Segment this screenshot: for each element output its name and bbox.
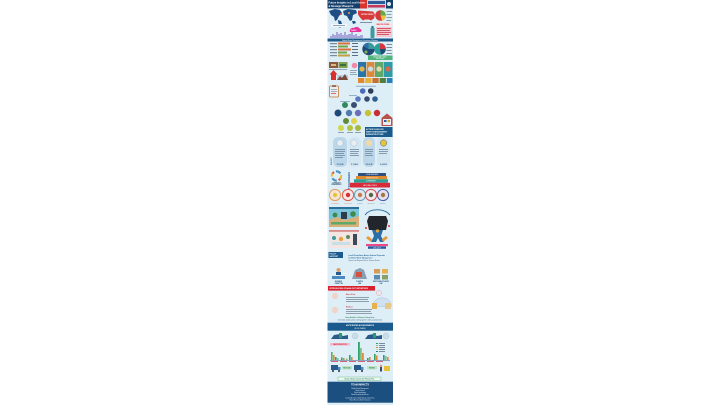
coloured tiles	[358, 62, 392, 77]
hierarchy of circular icons	[334, 86, 380, 133]
icon: committee: BUSINESS	[335, 281, 342, 283]
action plan box: INFRASTRUCTURE	[366, 133, 384, 136]
icon: recycling plant: PLASTICS	[356, 280, 363, 283]
icon: packaging: RESPONSIBLE PLASTIC	[373, 280, 389, 283]
icon: packaging	[373, 269, 389, 285]
truck 2	[354, 365, 364, 372]
title: Future Insights in Local Action	[328, 1, 366, 4]
action plan box: ACTION PLAN FOR	[366, 128, 384, 131]
card 1: $ 1.54 M	[337, 163, 344, 166]
icon: clipboard	[330, 85, 338, 97]
stacked layers	[350, 173, 390, 188]
SDG squares	[358, 78, 392, 83]
illustration: community workshop	[329, 230, 359, 248]
action plan box: WASTE MANAGEMENT	[366, 131, 388, 134]
icon: packaging: USE	[380, 283, 383, 285]
section bar: comparison: Global Waste Management Overview of Nations	[342, 39, 378, 42]
team impacts footer: Waste Plan for a Better Tomorrow	[350, 399, 370, 402]
infographic panel background	[328, 0, 393, 405]
section bar: comparison	[328, 38, 393, 42]
green tag 1	[342, 366, 352, 370]
green tag 2: REUSED	[369, 367, 375, 369]
icon: recycling plant	[352, 268, 367, 285]
row 2	[349, 95, 378, 102]
stacked layers: LOCAL PARTNERS	[366, 173, 378, 176]
closing statement	[338, 316, 383, 321]
icon: recycling plant: LAW	[358, 282, 362, 285]
row 4	[334, 110, 380, 116]
team impacts footer: Sustainable Cities, Stable Climate, Clean Seas	[346, 396, 375, 399]
mountain image	[337, 74, 348, 80]
card 3	[363, 137, 375, 167]
label under hero: CIVIC DUTY	[373, 247, 381, 249]
red callout text	[376, 23, 392, 37]
world map	[329, 9, 357, 28]
label under hero	[366, 244, 388, 249]
red callout text: WASTE CRISIS	[376, 23, 390, 26]
stacked layers: GOVERNMENT	[366, 181, 376, 183]
icon: red house arrow	[330, 70, 338, 80]
circle labels: SORTING	[357, 202, 363, 204]
bar chart	[330, 342, 390, 362]
icons: figures and clouds	[331, 333, 389, 339]
card 2	[348, 137, 361, 167]
card 3: $ 2.32 M	[366, 164, 373, 166]
initiative 2	[332, 306, 372, 314]
policy heading text: Local Plastic Bans Before National Proposals	[348, 254, 385, 257]
pink label: WASTE REDUCTION	[333, 343, 347, 346]
policy heading text: for Better Waste Management	[348, 257, 373, 260]
circle labels: DISPOSAL	[380, 201, 386, 204]
card 4	[377, 137, 390, 167]
policy box: POLICY	[330, 254, 337, 256]
icon: community ring: COMMUNITY	[332, 182, 341, 184]
closing statement: Every Statistic Is a Chance to Change Lives	[346, 316, 375, 319]
circle labels: RECYCLING	[368, 202, 375, 204]
policy heading text	[348, 254, 385, 262]
team impacts footer: Waste Segregation	[354, 391, 366, 394]
initiative 2: Reduce	[346, 306, 353, 308]
icon: community ring: ENGAGEMENT	[332, 183, 342, 186]
USA red map	[358, 10, 375, 23]
icon: city robot	[382, 114, 392, 126]
policy box: SUPPORT	[330, 256, 339, 258]
team impacts footer: TEAM IMPACTS	[351, 384, 369, 387]
initiative 1: Bans First	[346, 293, 356, 296]
USA red map: UNITED STATES	[361, 13, 373, 16]
row 1	[356, 86, 376, 94]
landfill cloud and skyline: PLASTIC	[351, 29, 357, 32]
text block beside photos	[329, 69, 357, 75]
stacked layers: PRIVATE SECTOR	[366, 176, 378, 179]
circle labels: COLLECTION	[344, 202, 352, 204]
photo strip	[329, 62, 348, 68]
row 5	[343, 118, 357, 124]
arc heading	[365, 210, 390, 215]
vertical label: BUDGET	[331, 157, 333, 165]
icon: committee: COMMITTEE	[334, 283, 343, 285]
header banner	[328, 0, 393, 8]
section header: achievements	[328, 323, 393, 331]
card 2: $ 1.34 M	[351, 163, 358, 166]
circle icons row	[329, 189, 389, 204]
vertical heading: transfers: TRANSFERS	[347, 172, 351, 189]
pie chart: teal and red	[374, 43, 392, 55]
green banner	[368, 55, 392, 60]
bottle tower	[370, 26, 374, 38]
pie chart: share	[375, 10, 392, 21]
closing statement: Communities and policy makers working together to build a sustainable future	[338, 318, 383, 321]
team impacts footer: Rubble Waste Management	[351, 387, 369, 390]
icon: committee	[332, 268, 345, 285]
row 3	[340, 101, 357, 108]
team impacts footer: Waste Recycling and Reuse	[351, 393, 369, 396]
circle labels	[331, 201, 386, 204]
stacked layers: NATIONAL FUNDS	[363, 184, 377, 187]
action plan box	[365, 127, 392, 137]
landfill cloud and skyline	[330, 24, 363, 38]
initiative 1	[332, 293, 369, 302]
slogan box	[338, 377, 381, 381]
green banner: Sustainable Goals	[373, 55, 387, 58]
pie chart: dark donut	[362, 43, 375, 55]
card 1	[333, 137, 347, 167]
section header: achievements: ANTICIPATED ACHIEVEMENTS	[346, 324, 375, 327]
illustration: beach clean-up	[329, 207, 359, 227]
row 6	[338, 125, 361, 133]
card 4: $ 4.32 M	[380, 163, 387, 166]
green tag 2	[367, 366, 377, 370]
team impacts footer: Waste Capture	[355, 389, 365, 392]
team impacts footer	[328, 382, 393, 403]
icon: community ring	[332, 171, 342, 186]
policy box	[328, 252, 343, 258]
circle labels: AWARENESS	[331, 201, 339, 204]
illustration: garbage bag held by hero	[365, 216, 390, 242]
slogan box: Every Choice Counts for Plastic-Free	[345, 378, 374, 380]
icon: pink circle	[352, 63, 357, 68]
section header: achievements: (IN 10 YEARS)	[354, 327, 366, 330]
red banner: INTRODUCING PHASE-OUT INITIATIVES	[330, 287, 369, 290]
legend	[376, 343, 385, 352]
policy heading text: Federal and Regional Policies Promote Reform	[348, 259, 381, 262]
figure with bin	[380, 365, 390, 372]
green tag 1: RECYCLED	[343, 367, 351, 369]
comparison table	[330, 42, 358, 56]
header banner: & Strategic Blueprint	[328, 5, 354, 8]
truck 1	[331, 365, 340, 372]
pink label	[330, 343, 350, 346]
green banner: Global Targets	[376, 57, 385, 60]
illustration: plastic cycle	[372, 290, 391, 309]
red banner	[328, 286, 375, 291]
